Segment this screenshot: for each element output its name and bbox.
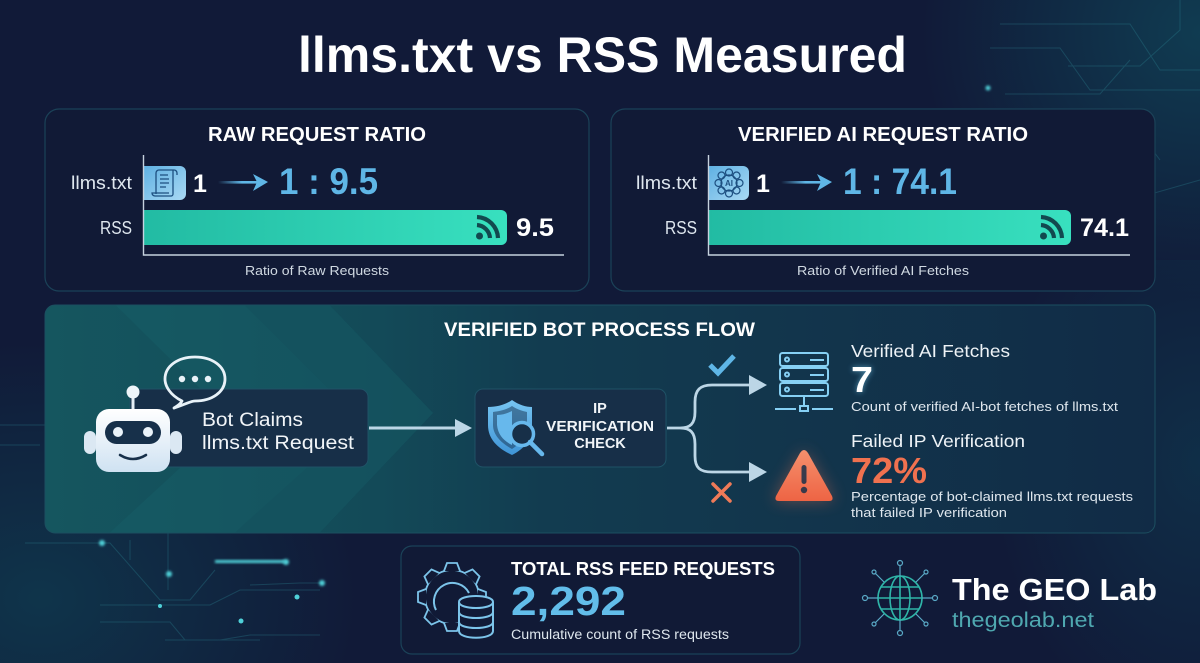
title: llms.txt vs RSS Measured	[298, 27, 907, 83]
panel: verified bot process flow	[45, 305, 1155, 533]
axis label: RSS: RSS	[665, 218, 697, 238]
heading: total rss: TOTAL RSS FEED REQUESTS	[511, 558, 775, 579]
result: failed ip verification: 72%	[851, 450, 927, 491]
ratio: 1 : 9.5: 1 : 9.5	[279, 161, 378, 202]
step: ip verification check: CHECK	[574, 436, 626, 452]
axis label: llms.txt: llms.txt	[71, 173, 132, 193]
panel: verified ai request ratio	[611, 109, 1155, 291]
panel: total rss feed requests	[401, 546, 800, 654]
axis label: RSS: RSS	[100, 218, 132, 238]
step: ip verification check: IP	[593, 401, 607, 417]
icon: gear with database	[418, 563, 493, 638]
value: 1: 1	[193, 170, 207, 198]
chart axes	[144, 155, 564, 255]
result: verified ai fetches: 7	[851, 359, 873, 400]
icon: shield with magnifier	[488, 400, 542, 455]
icon: globe	[862, 560, 938, 636]
bar: RSS	[143, 210, 507, 245]
value: 9.5: 9.5	[516, 214, 554, 242]
caption: Ratio of Verified AI Fetches	[797, 263, 970, 278]
axis label: llms.txt: llms.txt	[636, 173, 697, 193]
branching arrows	[667, 375, 767, 482]
heading: verified ai request ratio: VERIFIED AI REQUEST RATIO	[738, 124, 1028, 146]
brand name: The GEO Lab	[952, 572, 1157, 607]
result: verified ai fetches	[851, 341, 1118, 414]
logo: the geo lab	[862, 560, 1157, 636]
icon: warning triangle	[775, 450, 833, 501]
heading: raw request ratio: RAW REQUEST RATIO	[208, 124, 426, 146]
result: failed ip verification	[851, 431, 1134, 520]
caption: Ratio of Raw Requests	[245, 263, 390, 278]
chart axes	[708, 155, 1130, 255]
icon: server	[775, 353, 833, 411]
icon: rss	[476, 217, 498, 240]
ratio: 1 : 74.1: 1 : 74.1	[843, 161, 957, 202]
brand url: thegeolab.net	[952, 609, 1094, 632]
result: failed ip verification: Failed IP Verification	[851, 431, 1025, 451]
result: failed ip verification: Percentage of bot-claimed llms.txt requests	[851, 489, 1134, 504]
result: verified ai fetches: 7	[851, 359, 873, 400]
icon: rss	[1040, 217, 1062, 240]
bar: llms.txt with document icon	[143, 166, 186, 200]
value: 74.1: 74.1	[1080, 214, 1129, 242]
arrow: to ip check	[369, 419, 472, 437]
result: verified ai fetches: Verified AI Fetches	[851, 341, 1010, 361]
panel: raw request ratio	[45, 109, 589, 291]
result: failed ip verification: that failed IP verification	[851, 505, 1007, 520]
step: bot claims request	[130, 389, 368, 467]
value: 1: 1	[756, 170, 770, 198]
step: bot claims request: llms.txt Request	[202, 433, 355, 454]
arrow	[781, 174, 832, 191]
result: verified ai fetches: Count of verified AI-bot fetches of llms.txt	[851, 399, 1118, 414]
icon: check mark	[710, 356, 734, 373]
step: ip verification check: VERIFICATION	[546, 419, 654, 435]
arrow	[218, 174, 268, 191]
icon: robot	[84, 386, 182, 472]
heading: flow: VERIFIED BOT PROCESS FLOW	[444, 320, 755, 341]
bar: RSS	[708, 210, 1071, 245]
step: ip verification check	[475, 389, 666, 467]
icon: speech bubble	[165, 357, 225, 408]
caption: Cumulative count of RSS requests	[511, 627, 729, 642]
value: 2,292: 2,292	[511, 578, 626, 624]
step: bot claims request: Bot Claims	[202, 410, 303, 431]
bar: llms.txt with AI brain icon	[708, 166, 749, 200]
bar: llms.txt with AI brain icon: AI	[725, 179, 733, 188]
icon: cross mark	[713, 484, 730, 501]
